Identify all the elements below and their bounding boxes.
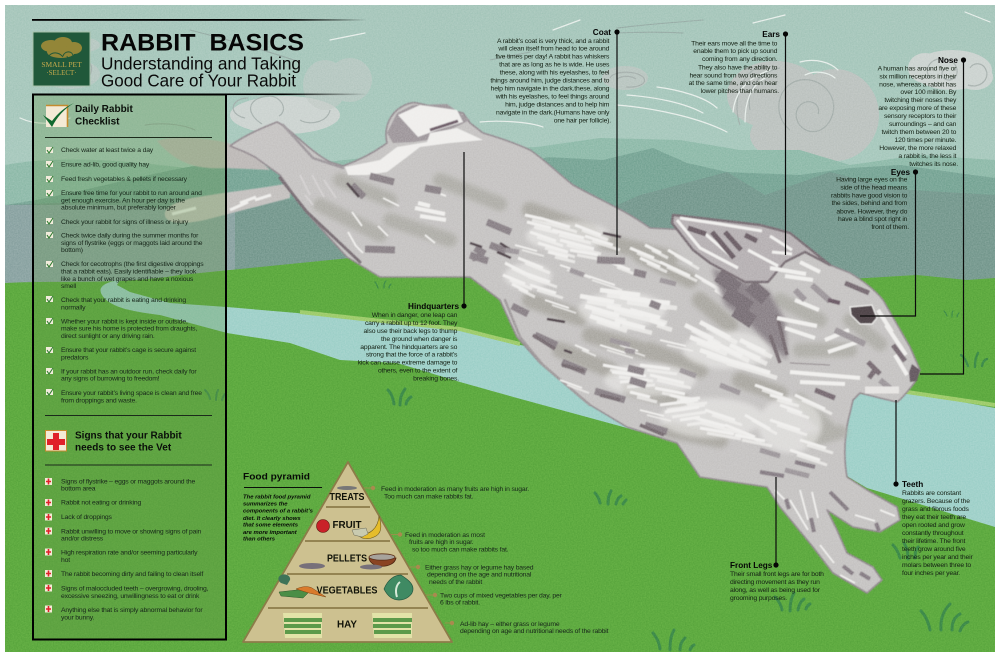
callout: coat: five times per day! A rabbit has whiskers bbox=[495, 53, 610, 60]
text: vet signs items: excessive sneezing, unwillingness to eat or drink bbox=[61, 593, 200, 600]
rabbit: denser fur streaks bbox=[510, 220, 833, 465]
icons: check bullets bbox=[46, 147, 53, 395]
callout: nose bbox=[878, 56, 966, 374]
text: checklist items: Whether your rabbit is kept inside or outside, bbox=[61, 318, 188, 325]
callout: hindquarters: kick can cause extreme damage to bbox=[358, 360, 458, 366]
callout: coat: things around him, judge distances and to bbox=[490, 77, 610, 84]
callout: front legs: Their small front legs are for both bbox=[730, 571, 824, 578]
logo: Small Pet Select: SMALL PET bbox=[41, 60, 82, 69]
callout: teeth: Rabbits are constant bbox=[902, 490, 961, 497]
callout: nose: over 100 million. By bbox=[900, 89, 957, 96]
rabbit: body bbox=[230, 103, 920, 593]
text: food pyramid intro: diet. It clearly shows bbox=[243, 516, 301, 522]
note: fruit: Feed in moderation as most bbox=[405, 532, 485, 539]
callout: teeth: constantly throughout bbox=[902, 530, 964, 537]
text: checklist items: absolute minimum, but preferably longer bbox=[61, 204, 177, 212]
callout: nose: are exposing more of these bbox=[878, 105, 957, 112]
text: food pyramid intro: summarizes the bbox=[243, 502, 288, 508]
text: checklist items: If your rabbit has an outdoor run, check daily for bbox=[61, 368, 197, 375]
callout: coat bbox=[490, 28, 620, 255]
icon: red cross bbox=[46, 430, 66, 451]
note: pellets: Either grass hay or legume hay based bbox=[425, 564, 534, 571]
callout: coat: that are as long as he is wide. He uses bbox=[499, 61, 610, 68]
callout: hindquarters: apparent. The hindquarters are so bbox=[360, 344, 458, 351]
logo: Small Pet Select: ·SELECT· bbox=[46, 69, 77, 77]
callout: eyes: the sides, behind and from bbox=[832, 200, 908, 207]
title: Good Care of Your Rabbit bbox=[101, 70, 296, 90]
rabbit: head detail bbox=[770, 262, 907, 398]
callout: teeth bbox=[893, 400, 974, 577]
callout: nose: sensory receptors to their bbox=[884, 113, 957, 120]
text: checklist items: signs of flystrike (eggs or maggots laid around the bbox=[61, 240, 203, 247]
wind lines bbox=[20, 12, 990, 132]
callout: hindquarters: Hindquarters bbox=[408, 302, 459, 311]
rabbit: white fur streaks bbox=[503, 215, 826, 460]
text: checklist items: Ensure free time for your rabbit to run around and bbox=[61, 190, 202, 197]
text: checklist items: any signs of burrowing to freedom! bbox=[61, 376, 160, 383]
callout: nose: six million receptors in their bbox=[879, 73, 957, 80]
icon: check box bbox=[43, 103, 74, 127]
callout: front legs: along, as well as being used for bbox=[730, 587, 821, 594]
title: RABBIT BASICS bbox=[101, 30, 304, 56]
note: treats: Feed in moderation as many fruits are high in sugar. bbox=[381, 486, 529, 493]
callout: nose: A human has around five or bbox=[878, 65, 957, 72]
note: pellets: depending on the age and nutritional bbox=[427, 571, 532, 578]
note: pellets: needs of the rabbit bbox=[429, 579, 482, 586]
heading: vet signs: Signs that your Rabbit bbox=[75, 430, 182, 442]
text: checklist items: Ensure ad-lib, good quality hay bbox=[61, 162, 150, 168]
note: fruit: fruits are high in sugar. bbox=[409, 539, 474, 546]
callout: eyes bbox=[831, 168, 918, 316]
callout: hindquarters: When in danger, one leap can bbox=[372, 312, 458, 319]
panel: checklist and vet signs bbox=[33, 94, 226, 640]
text: checklist items: Check water at least twice a day bbox=[61, 147, 154, 154]
text: vet signs items: Anything else that is simply abnormal behavior for bbox=[61, 607, 203, 614]
callout: nose: twitching their noses they bbox=[884, 97, 957, 104]
rabbit: eye bbox=[850, 305, 877, 324]
callout: eyes: above. However, they do bbox=[836, 208, 908, 215]
rabbit: shoulder shadow bbox=[712, 268, 787, 360]
rabbit: nose bbox=[909, 364, 920, 382]
callout: nose: a rabbit is, the less it bbox=[898, 153, 957, 160]
callout: nose: surroundings – and can bbox=[889, 121, 957, 128]
callout: teeth: molars between three to bbox=[902, 562, 971, 569]
callout: hindquarters: also use their back legs to thump bbox=[364, 328, 458, 335]
callout: eyes: rabbits have good vision to bbox=[831, 192, 908, 199]
callout: teeth: grazers. Because of the bbox=[902, 498, 970, 505]
rabbit: white wash bbox=[504, 221, 822, 453]
rabbit: hind feet bbox=[157, 138, 290, 223]
rabbit: mid gray patches bbox=[320, 180, 880, 440]
text: checklist items: get enough exercise. An hour per day is the bbox=[61, 197, 185, 204]
callout: hindquarters: breaking bones. bbox=[413, 376, 459, 382]
callout: eyes: Having large eyes on the bbox=[836, 176, 908, 183]
callout: teeth: teeth grow around five bbox=[902, 546, 966, 553]
rabbit: tail bbox=[345, 104, 483, 175]
callout: eyes: side of the head means bbox=[840, 184, 908, 191]
callout: coat: navigate in the dark.(Humans have only bbox=[496, 109, 610, 116]
header rules bbox=[32, 19, 367, 95]
text: checklist items: normally bbox=[61, 304, 86, 311]
food notes bbox=[364, 486, 609, 635]
callout: ears: at the same time, and can hear bbox=[689, 80, 778, 87]
callout: teeth: Teeth bbox=[902, 480, 923, 489]
text: checklist items: Ensure your rabbit’s living space is clean and free bbox=[61, 390, 202, 397]
text: checklist items: Check your rabbit for signs of illness or injury bbox=[61, 219, 189, 226]
clouds bbox=[40, 38, 993, 163]
note connectors bbox=[364, 486, 454, 625]
callout: ears: hear sound from two directions bbox=[689, 72, 778, 79]
text: vet signs items: Rabbit unwilling to move or showing signs of pain bbox=[61, 528, 202, 535]
title bbox=[101, 30, 304, 90]
icons: red cross bullets bbox=[45, 478, 52, 612]
river bank bbox=[300, 312, 995, 405]
illustration: rabbit bbox=[157, 103, 920, 593]
river bbox=[101, 280, 995, 527]
pyramid labels bbox=[316, 492, 378, 630]
callout: ears: coming from any direction. bbox=[702, 56, 778, 63]
callout: coat: one hair per follicle). bbox=[554, 117, 611, 124]
callout: teeth: open rooted and grow bbox=[902, 522, 965, 529]
heading: daily checklist: Checklist bbox=[75, 116, 120, 128]
callout: nose: 120 times per minute. bbox=[894, 137, 957, 144]
callout: nose: twitch them between 20 to bbox=[882, 129, 957, 136]
callout: hindquarters: strong that the force of a rabbit’s bbox=[366, 352, 458, 358]
title: Understanding and Taking bbox=[101, 54, 301, 74]
text: checklist items: smell bbox=[61, 283, 77, 290]
callout: ears: lower pitches than humans. bbox=[701, 88, 779, 95]
mountains bbox=[5, 138, 995, 283]
callout: teeth: grass and fibrous foods bbox=[902, 506, 970, 513]
text: checklist items: direct sunlight or any driving rain. bbox=[61, 333, 155, 340]
text: checklist items: Ensure that your rabbit’s cage is secure against bbox=[61, 347, 196, 354]
callout: teeth: four inches per year. bbox=[902, 570, 960, 577]
pyramid labels: VEGETABLES bbox=[316, 586, 378, 596]
callout: front legs bbox=[730, 477, 826, 602]
callout: coat: these, along with his eyelashes, to feel bbox=[500, 69, 610, 76]
text: vet signs items: Signs of maloccluded teeth – overgrowing, drooling, bbox=[61, 586, 209, 592]
callout: teeth: inches per year and their bbox=[902, 554, 973, 561]
callout: hindquarters: others, even to the extent of bbox=[378, 368, 458, 374]
callout: teeth: they eat their teeth are bbox=[902, 514, 966, 521]
note: treats: Too much can make rabbits fat. bbox=[384, 493, 474, 500]
callout: coat: will clean itself from head to toe around bbox=[497, 45, 610, 52]
rabbit: ear bbox=[672, 215, 830, 282]
callout: ears: They also have the ability to bbox=[698, 64, 778, 71]
heading: vet signs: needs to see the Vet bbox=[75, 442, 172, 454]
pyramid triangle bbox=[243, 462, 452, 642]
heading: food pyramid: Food pyramid bbox=[243, 472, 310, 482]
text: vet signs items: bottom area bbox=[61, 486, 96, 492]
text: checklist items: predators bbox=[61, 354, 89, 361]
text: food pyramid intro: than others bbox=[243, 537, 276, 543]
pyramid art bbox=[278, 486, 413, 638]
text: checklist items: from droppings and waste. bbox=[61, 397, 137, 404]
callout: coat: him, judge distances and to help him bbox=[505, 101, 610, 108]
callout: coat: help him navigate in the dark.these, along bbox=[491, 85, 610, 92]
note: hay: Ad-lib hay – either grass or legume bbox=[460, 621, 560, 628]
callout: hindquarters: carry a rabbit up to 12 foot. They bbox=[365, 320, 458, 327]
callout: nose: However, the more relaxed bbox=[879, 145, 957, 152]
text: vet signs items: hot bbox=[61, 557, 70, 564]
text: food pyramid intro: that some elements bbox=[243, 523, 299, 529]
text: food pyramid intro: The rabbit food pyramid bbox=[243, 494, 311, 500]
text: vet signs items: your bunny. bbox=[61, 614, 94, 621]
upper grass bbox=[5, 258, 995, 652]
callout: eyes: Eyes bbox=[891, 168, 910, 177]
callout: teeth: their lifetime. The front bbox=[902, 538, 966, 545]
text: food pyramid intro: are more important bbox=[243, 530, 298, 536]
callout: ears: enable them to pick up sound bbox=[693, 48, 778, 55]
pyramid labels: HAY bbox=[337, 620, 357, 630]
note: hay: depending on age and nutritional needs of the rabbit bbox=[460, 628, 609, 635]
text: checklist items: bottom) bbox=[61, 247, 83, 254]
callout: eyes: front of them. bbox=[871, 224, 909, 231]
note: vegetables: 6 lbs of rabbit. bbox=[440, 599, 480, 606]
logo: Small Pet Select bbox=[33, 32, 90, 86]
rabbit: rim shadows bbox=[280, 125, 590, 405]
callout: nose: twitches its nose. bbox=[909, 161, 958, 168]
callout: coat: Coat bbox=[593, 28, 611, 37]
callout: front legs: directing movement as they run bbox=[730, 579, 820, 586]
text: checklist items: like a bunch of wet grapes and have a noxious bbox=[61, 276, 194, 283]
text: vet signs items: The rabbit becoming dirty and failing to clean itself bbox=[61, 571, 203, 578]
pyramid labels: PELLETS bbox=[327, 554, 367, 564]
text: vet signs items: Lack of droppings bbox=[61, 514, 113, 521]
pyramid labels: FRUIT bbox=[332, 520, 362, 531]
text: vet signs items: and/or distress bbox=[61, 536, 104, 543]
rabbit: dark fur patches bbox=[347, 176, 879, 579]
rabbit: rear and leg streaks bbox=[300, 175, 895, 583]
text: vet signs items: Rabbit not eating or drinking bbox=[61, 500, 141, 507]
text: checklist items: Check that your rabbit is eating and drinking bbox=[61, 297, 186, 304]
callout: eyes: have a blind spot right in bbox=[838, 216, 908, 223]
note: fruit: so too much can make rabbits fat. bbox=[412, 546, 509, 553]
text: vet signs items: Signs of flystrike – eggs or maggots around the bbox=[61, 478, 195, 485]
callout: front legs: grooming purposes. bbox=[730, 595, 787, 602]
note: vegetables: Two cups of mixed vegetables per day, per bbox=[440, 592, 563, 599]
text: checklist items: Feed fresh vegetables & pellets if necessary bbox=[61, 176, 188, 183]
pyramid labels: TREATS bbox=[330, 492, 365, 503]
text: checklist items: Check twice daily during the summer months for bbox=[61, 232, 199, 240]
callout: coat: A rabbit’s coat is very thick, and a rabbit bbox=[497, 38, 610, 45]
callout: ears: Ears bbox=[762, 30, 780, 39]
grass tufts bbox=[205, 281, 987, 650]
callout: ears bbox=[689, 30, 788, 255]
callout: hindquarters bbox=[358, 152, 467, 382]
callout: ears: Their ears move all the time to bbox=[691, 40, 778, 47]
callout: nose: Nose bbox=[938, 56, 958, 65]
text: checklist items: make sure his home is protected from draughts, bbox=[61, 326, 197, 333]
text: checklist items: that a rabbit eats). Easily identifiable – they look bbox=[61, 268, 197, 275]
text: food pyramid intro: components of a rabbit’s bbox=[243, 509, 314, 515]
text: vet signs items: High respiration rate and/or seeming particularly bbox=[61, 550, 198, 557]
callout: hindquarters: the ground when danger is bbox=[381, 336, 458, 343]
callout: coat: with his eyelashes, to feel things around bbox=[495, 93, 610, 100]
callout: front legs: Front Legs bbox=[730, 561, 773, 570]
text: checklist items: Check for cecotrophs (the first digestive droppings bbox=[61, 261, 204, 268]
heading: daily checklist: Daily Rabbit bbox=[75, 104, 133, 115]
food pyramid bbox=[243, 462, 452, 642]
callout: nose: nose, whereas a rabbit has bbox=[879, 81, 957, 88]
